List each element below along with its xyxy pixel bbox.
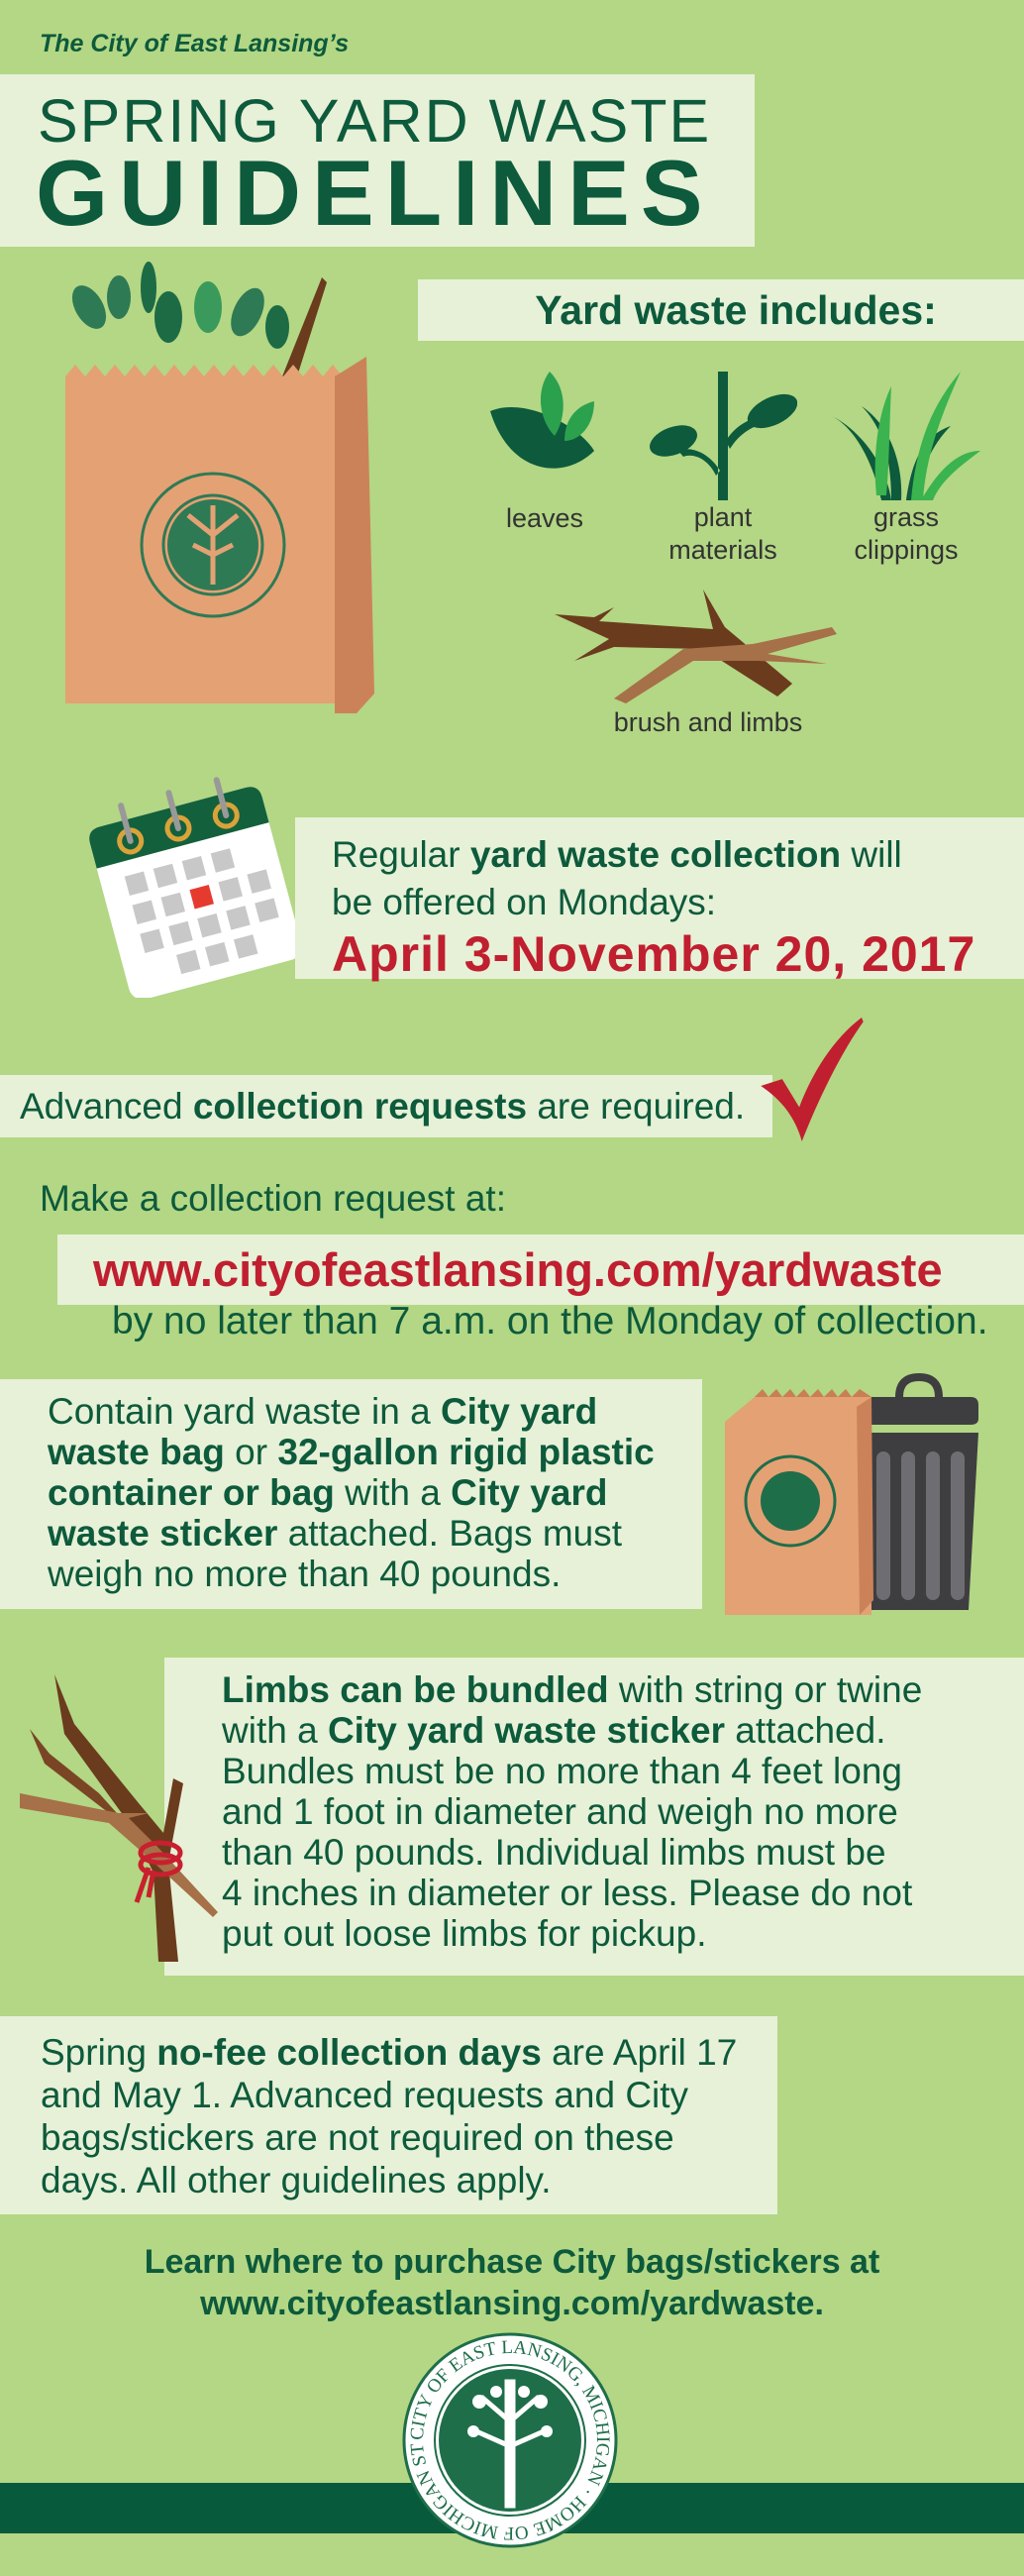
panel: no-fee days: and May 1. Advanced requests and City bbox=[41, 2075, 688, 2115]
panel: limbs: and 1 foot in diameter and weigh no more bbox=[222, 1791, 898, 1832]
icon: brush and limbs bbox=[555, 590, 837, 703]
panel: collection dates bbox=[295, 817, 1024, 979]
panel: no-fee days bbox=[0, 2016, 777, 2214]
panel: limbs: Bundles must be no more than 4 feet long bbox=[222, 1751, 902, 1791]
panel: no-fee days: bags/stickers are not required on these bbox=[41, 2117, 674, 2158]
panel: limbs bbox=[164, 1658, 1024, 1976]
panel: contain yard waste: Contain yard waste in a City yard bbox=[48, 1391, 597, 1432]
panel: advanced requests bbox=[0, 1075, 772, 1137]
yard waste includes heading bbox=[418, 279, 1024, 341]
panel: no-fee days: days. All other guidelines apply. bbox=[41, 2160, 552, 2200]
text: learn where to purchase bbox=[145, 2243, 879, 2322]
panel: collection dates: Regular yard waste collection will bbox=[332, 834, 902, 875]
text: make a request: Make a collection request at: bbox=[40, 1178, 506, 1219]
label: grass clippings: clippings bbox=[854, 535, 959, 565]
text: learn where to purchase: Learn where to purchase City bags/stickers at bbox=[145, 2243, 879, 2281]
panel: url bbox=[57, 1234, 1024, 1305]
title line 2: GUIDELINES bbox=[36, 141, 714, 245]
panel: url: www.cityofeastlansing.com/yardwaste bbox=[93, 1243, 943, 1296]
label: grass clippings: grass bbox=[873, 502, 939, 532]
title box bbox=[0, 74, 755, 247]
panel: contain yard waste: weigh no more than 40 pounds. bbox=[48, 1554, 561, 1594]
icon: plant bbox=[650, 372, 797, 500]
panel: collection dates: be offered on Mondays: bbox=[332, 882, 716, 922]
text: deadline: by no later than 7 a.m. on the Monday of collection. bbox=[112, 1300, 988, 1342]
panel: contain yard waste: container or bag with a City yard bbox=[48, 1472, 607, 1513]
title line 1: SPRING YARD WASTE bbox=[38, 87, 711, 155]
icon: calendar bbox=[89, 777, 295, 998]
yard waste includes heading: Yard waste includes: bbox=[535, 287, 937, 333]
panel: limbs: 4 inches in diameter or less. Please do not bbox=[222, 1873, 912, 1913]
panel: limbs: put out loose limbs for pickup. bbox=[222, 1913, 706, 1954]
panel: contain yard waste bbox=[0, 1379, 702, 1609]
label: plant materials: plant bbox=[694, 502, 752, 532]
icon: bag and trash can bbox=[725, 1373, 978, 1615]
footer band bbox=[0, 2483, 1024, 2533]
label: brush and limbs: brush and limbs bbox=[614, 707, 802, 737]
icon: paper bag with plants bbox=[65, 262, 374, 713]
icon: leaves bbox=[490, 372, 594, 469]
label: leaves: leaves bbox=[506, 503, 583, 533]
subtitle: The City of East Lansing’s bbox=[40, 30, 349, 57]
label: plant materials: materials bbox=[668, 535, 777, 565]
date: April 3-November 20, 2017 bbox=[332, 926, 975, 982]
label: plant materials bbox=[668, 502, 777, 565]
panel: no-fee days: Spring no-fee collection days are April 17 bbox=[41, 2032, 737, 2073]
panel: limbs: than 40 pounds. Individual limbs must be bbox=[222, 1832, 886, 1873]
panel: limbs: with a City yard waste sticker attached. bbox=[222, 1710, 885, 1751]
icon: bundled limbs bbox=[20, 1674, 218, 1962]
text: learn where to purchase: www.cityofeastlansing.com/yardwaste. bbox=[200, 2285, 824, 2322]
panel: limbs: Limbs can be bundled with string or twine bbox=[222, 1669, 922, 1710]
panel: contain yard waste: waste sticker attached. Bags must bbox=[48, 1513, 622, 1554]
panel: contain yard waste: waste bag or 32-gallon rigid plastic bbox=[48, 1432, 655, 1472]
icon: grass bbox=[834, 372, 980, 500]
panel: advanced requests: Advanced collection requests are required. bbox=[20, 1086, 745, 1127]
label: grass clippings bbox=[854, 502, 959, 565]
icon: checkmark bbox=[761, 1018, 864, 1141]
